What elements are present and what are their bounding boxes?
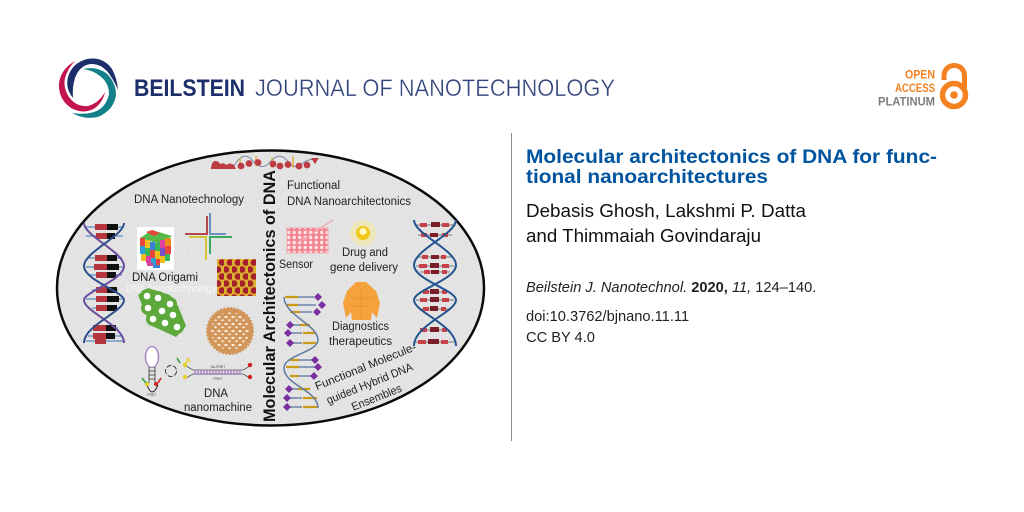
label: DNA nanomachine: nanomachine: [184, 402, 252, 414]
label: DNA nanomachine: [184, 388, 252, 414]
open access platinum badge: ACCESS: [895, 83, 935, 95]
open access platinum badge: PLATINUM: [878, 96, 935, 108]
article title: [526, 146, 937, 188]
icon: gold nanoparticle: [350, 220, 376, 246]
label: DNA Origami: DNA Origami: [132, 272, 198, 284]
label: Drug and gene delivery: Drug and: [342, 247, 388, 259]
label: Diagnostics therapeutics: Diagnostics: [332, 321, 389, 333]
centre hybrid DNA helix: [283, 293, 326, 411]
label: Diagnostics therapeutics: therapeutics: [329, 336, 392, 348]
journal name: BEILSTEIN: [134, 75, 245, 102]
authors: and Thimmaiah Govindaraju: [526, 226, 761, 246]
left DNA helix: [84, 223, 124, 344]
label: Drug and gene delivery: [330, 247, 398, 274]
article title: tional nanoarchitectures: [526, 166, 768, 188]
icon: brown DNA nanoparticle: [207, 308, 253, 354]
icon: green honeycomb lattice: [138, 288, 186, 337]
journal name: [134, 75, 615, 102]
label: Diagnostics therapeutics: [329, 321, 392, 348]
label: Functional Molecule-guided Hybrid DNA Ensembles: Ensembles: [350, 383, 404, 414]
icon: orange torso: [343, 282, 380, 320]
icon: DNA nanomachine diagram: FRET: [213, 377, 223, 381]
vertical divider: [511, 133, 512, 441]
label: Sensor: Sensor: [279, 259, 313, 271]
doi: doi:10.3762/bjnano.11.11: [526, 309, 689, 325]
citation: Beilstein J. Nanotechnol. 2020, 11, 124–140.: [526, 280, 816, 296]
faded ghost label: DNA Nanotechnology: [126, 283, 216, 295]
icon: DNA origami cube: [137, 227, 174, 270]
icon: sensor plate: [287, 220, 333, 253]
heading: Functional DNA Nanoarchitectonics: Functional: [287, 180, 340, 192]
licence: CC BY 4.0: [526, 330, 595, 346]
heading: Functional DNA Nanoarchitectonics: DNA Nanoarchitectonics: [287, 196, 411, 208]
oval background: [57, 150, 484, 426]
vertical title: Molecular Architectonics of DNA: [260, 170, 279, 422]
label: Functional Molecule-guided Hybrid DNA Ensembles: [314, 341, 418, 414]
heading: Functional DNA Nanoarchitectonics: [287, 180, 411, 208]
top molecular chain: [211, 156, 319, 169]
icon: crossed arrows: [185, 213, 232, 260]
icon: DNA nanomachine diagram: FRET: [147, 393, 157, 397]
label: Drug and gene delivery: gene delivery: [330, 262, 398, 274]
journal logo: three interlocking crescents: [59, 58, 118, 118]
authors: Debasis Ghosh, Lakshmi P. Datta: [526, 201, 807, 221]
article title: Molecular architectonics of DNA for func-: [526, 146, 937, 168]
icon: DNA nanomachine diagram: [142, 346, 252, 397]
graphical abstract: oval panel: [57, 150, 484, 426]
open access platinum badge: OPEN: [905, 70, 935, 82]
right DNA helix: [414, 220, 456, 346]
label: Functional Molecule-guided Hybrid DNA Ensembles: guided Hybrid DNA: [325, 361, 415, 407]
icon: red and gold lattice square: [217, 259, 256, 296]
label: DNA nanomachine: DNA: [204, 388, 228, 400]
icon: DNA nanomachine diagram: No-FRET: [211, 365, 226, 369]
label: Functional Molecule-guided Hybrid DNA Ensembles: Functional Molecule-: [314, 341, 418, 393]
heading: DNA Nanotechnology: DNA Nanotechnology: [134, 194, 244, 206]
open access platinum badge: [878, 66, 966, 108]
authors: [526, 201, 807, 246]
journal name: JOURNAL OF NANOTECHNOLOGY: [255, 75, 615, 102]
